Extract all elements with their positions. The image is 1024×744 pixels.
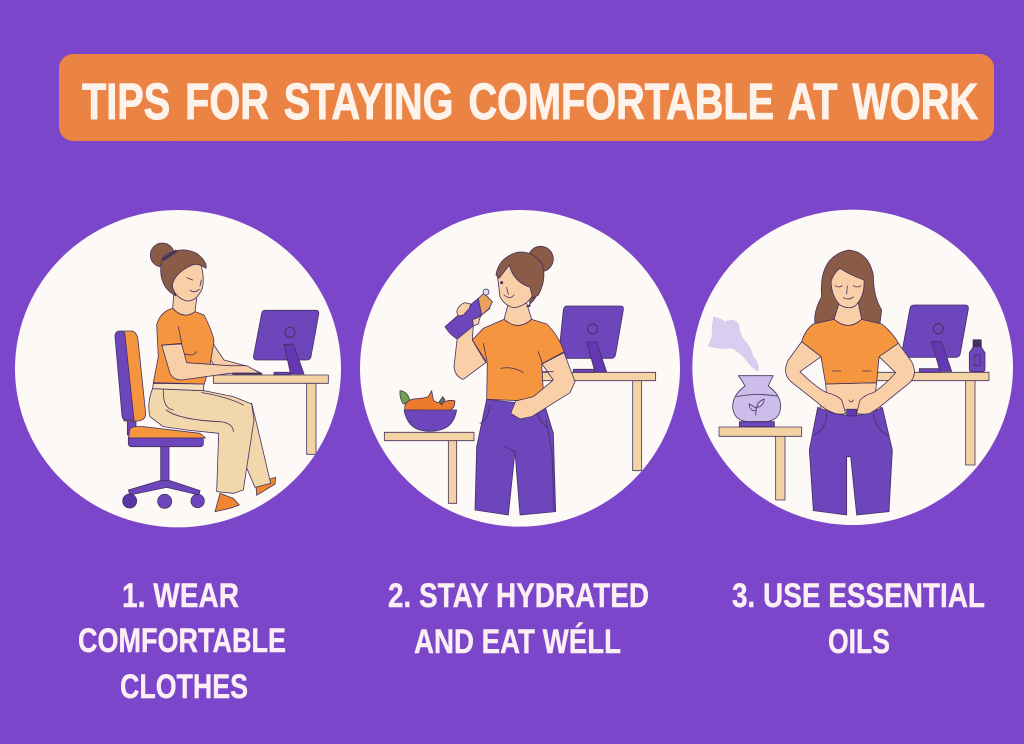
small table: [719, 427, 802, 500]
caption 1: [78, 577, 286, 706]
illustration: woman with diffuser: [708, 250, 989, 515]
office chair: [115, 331, 206, 508]
small table: [384, 432, 474, 503]
illustration: seated woman at desk: [115, 243, 328, 512]
desk: [213, 375, 328, 454]
head: [496, 246, 553, 308]
fruit bowl: [400, 391, 457, 431]
face: [831, 268, 864, 308]
caption 3: [732, 577, 985, 661]
water bottle: [445, 289, 492, 339]
front arm: [162, 344, 262, 380]
panel: wear comfortable clothes: [15, 210, 341, 527]
resting arm: [511, 353, 575, 419]
caption 1: 1. WEAR: [122, 577, 239, 615]
caption 3: OILS: [828, 623, 890, 661]
arms: [786, 342, 914, 414]
icon: computer monitor: [253, 310, 319, 375]
panel: stay hydrated and eat well: [360, 210, 680, 527]
keyboard: [232, 373, 263, 375]
circle backdrop: [692, 210, 1013, 525]
circle backdrop: [15, 210, 341, 527]
shirt: [153, 308, 214, 384]
caption 2: 2. STAY HYDRATED: [388, 577, 649, 615]
neck: [504, 300, 532, 325]
desk: [877, 372, 989, 465]
pants: [809, 407, 892, 515]
belt: [153, 383, 204, 391]
icon: computer monitor: [902, 305, 968, 372]
pants: [475, 399, 556, 515]
caption 2: [388, 577, 649, 661]
torso: [818, 383, 882, 410]
illustration: woman drinking water: [384, 246, 656, 515]
caption 2: AND EAT WÉLL: [414, 623, 621, 661]
shirt: [472, 319, 564, 402]
steam: [708, 317, 759, 372]
desk: [542, 372, 656, 471]
drinking arm: [454, 324, 486, 379]
caption 1: COMFORTABLE: [78, 622, 286, 660]
caption 1: CLOTHES: [120, 668, 248, 706]
icon: computer monitor: [558, 306, 623, 372]
shirt detail: [483, 343, 553, 373]
pants: [149, 388, 276, 512]
circle backdrop: [360, 210, 680, 527]
head: [150, 243, 206, 315]
title banner: [59, 54, 994, 141]
panel: use essential oils: [692, 210, 1013, 525]
icon: diffuser: [733, 376, 781, 427]
hair: [815, 250, 882, 323]
icon: oil bottle: [969, 339, 985, 372]
sleeve hem: [162, 327, 197, 355]
neck: [834, 303, 862, 325]
back arm: [211, 344, 262, 374]
shirt: [802, 319, 898, 384]
